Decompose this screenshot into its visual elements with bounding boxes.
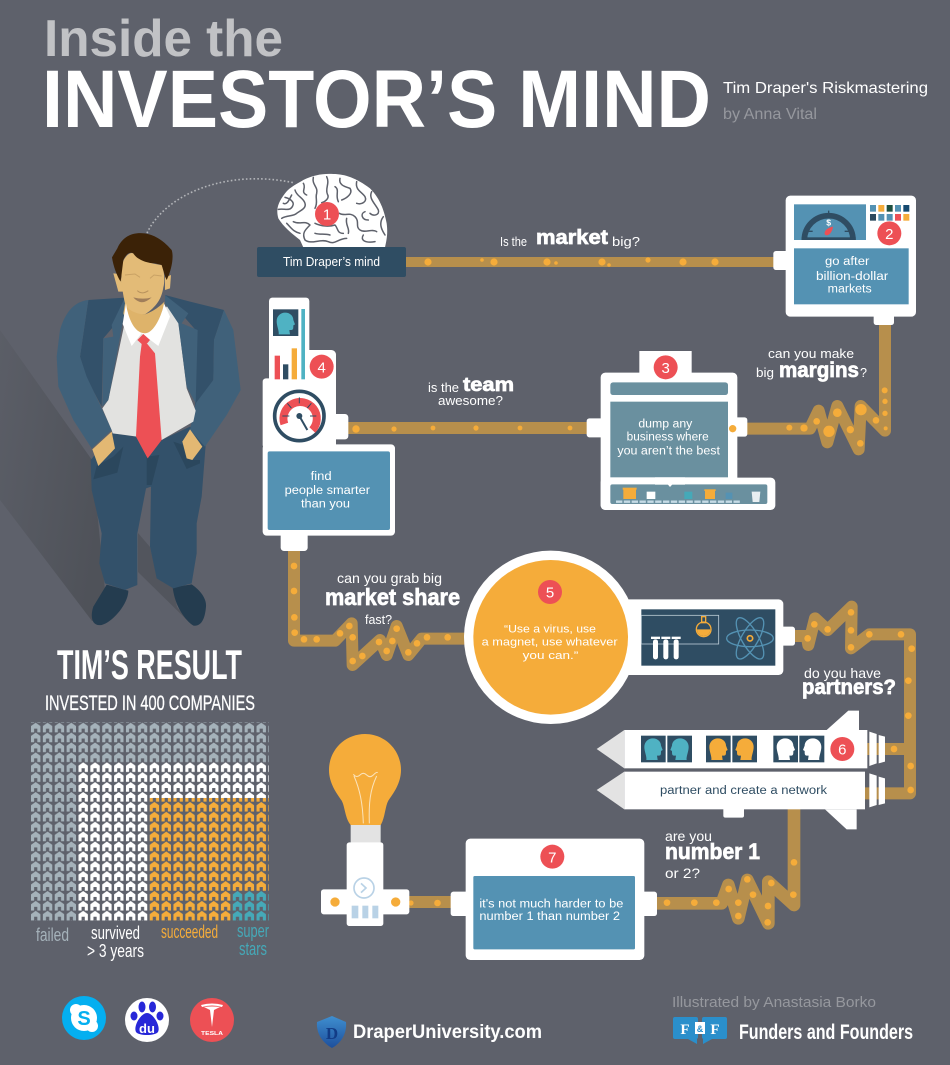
number 2: 2	[885, 226, 894, 243]
dotted thought line	[147, 179, 295, 233]
question: market share: can you grab big	[337, 570, 442, 586]
logo: Funders and Founders: &	[697, 1024, 704, 1034]
shirt	[102, 303, 196, 440]
pipe: mind to market	[400, 257, 780, 267]
step 2: machine	[773, 196, 916, 325]
number 3	[654, 355, 678, 379]
step 4: machine	[263, 298, 395, 551]
step 3: machine	[587, 351, 775, 510]
icon: skype: S	[77, 1008, 91, 1030]
icon: skype	[62, 996, 106, 1040]
icon: brain	[277, 174, 387, 247]
question: market: Is the	[500, 234, 527, 249]
bulb	[329, 734, 401, 843]
pipe: lab to rockets	[793, 607, 915, 793]
lapels	[102, 295, 198, 407]
upper rocket	[597, 711, 885, 768]
question: margins: margins	[779, 359, 859, 382]
title	[42, 10, 711, 145]
lab panel	[641, 609, 775, 666]
pipe: team to market share zigzag	[291, 547, 470, 665]
number 6: 6	[838, 742, 847, 759]
text panel: it's not much harder to be	[479, 896, 624, 910]
question: team: team	[463, 375, 514, 396]
question: partners	[802, 665, 896, 699]
neck and face	[113, 253, 171, 333]
box: Tim Draper's mind: Tim Draper’s mind	[283, 255, 380, 269]
collar	[123, 303, 170, 346]
quote circle: “Use a virus, use	[504, 623, 596, 635]
text panel: find	[311, 469, 332, 483]
text panel	[473, 876, 635, 949]
question: team	[428, 375, 514, 408]
flask	[696, 617, 711, 637]
logo: Funders and Founders: F	[680, 1022, 690, 1038]
colour squares	[870, 205, 909, 221]
number 3: 3	[661, 360, 670, 377]
chart: 400 companies pictogram	[31, 722, 269, 921]
question: number 1: or 2?	[665, 865, 700, 881]
man shadow	[0, 330, 192, 625]
question: margins	[756, 346, 867, 382]
chart legend: succeeded	[161, 922, 218, 942]
title: Inside the	[44, 10, 283, 68]
step 7: machine	[451, 839, 657, 960]
icon: baidu: du	[139, 1021, 155, 1036]
question: market: market	[536, 227, 608, 249]
question: partners: partners?	[802, 676, 896, 699]
text panel: number 1 than number 2	[479, 909, 620, 923]
quote circle: you can.”	[523, 650, 579, 662]
lower rocket: partner and create a network	[660, 783, 828, 797]
subtitle: by Anna Vital	[723, 106, 817, 123]
question: market share: fast?	[365, 612, 392, 627]
illustration: Tim Draper	[57, 233, 241, 626]
quote circle	[473, 560, 628, 715]
subtitle	[723, 80, 928, 123]
icon: tesla: TESLA	[201, 1031, 224, 1037]
jacket	[57, 295, 241, 448]
question: market share: market share	[325, 584, 460, 610]
subtitle: Tim Draper's Riskmastering	[723, 80, 928, 97]
question: partners: do you have	[804, 665, 881, 681]
question: team: is the	[428, 380, 459, 395]
question: market share	[325, 570, 460, 627]
question: margins: ?	[860, 365, 867, 380]
gauge panel	[794, 204, 866, 240]
conveyor belt	[610, 477, 767, 504]
text panel	[794, 248, 909, 304]
text panel: markets	[828, 282, 872, 296]
chart legend	[36, 921, 269, 961]
icon: tesla	[190, 998, 234, 1042]
lower rocket	[597, 772, 885, 829]
logo: Draper University: D	[326, 1024, 338, 1043]
chart legend: > 3 years	[87, 941, 144, 961]
pipe: team to best	[345, 422, 595, 434]
number 4	[310, 355, 334, 379]
chart legend: failed	[36, 925, 69, 945]
text panel	[268, 451, 390, 530]
text panel: go after	[825, 254, 869, 268]
portrait icon	[273, 309, 298, 336]
atom	[727, 614, 773, 663]
gauge panel: $	[826, 217, 831, 227]
text panel: you aren’t the best	[617, 443, 721, 457]
question: market	[500, 227, 640, 249]
box: Tim Draper's mind	[257, 247, 406, 277]
number 5: 5	[546, 585, 554, 602]
step 5: lab machine	[464, 551, 795, 724]
number 2	[877, 221, 901, 245]
tie	[136, 334, 162, 458]
pipe: rockets to number one zigzag	[653, 803, 797, 926]
question: number 1: number 1	[665, 839, 760, 864]
question: margins: big	[756, 365, 774, 380]
credit: illustrator: Illustrated by Anastasia Borko	[672, 994, 876, 1011]
pipe: market to margins zigzag	[743, 322, 888, 449]
pipe: bulb to number one	[408, 896, 456, 908]
step 1: brain	[257, 174, 406, 277]
heading: Tim's result: INVESTED IN 400 COMPANIES	[45, 692, 255, 715]
question: margins: can you make	[768, 346, 854, 361]
logo: Draper University: DraperUniversity.com	[353, 1022, 542, 1043]
question: team: awesome?	[438, 393, 503, 408]
text panel: people smarter	[285, 483, 370, 497]
hands	[92, 429, 202, 466]
number 1: 1	[323, 206, 331, 224]
shoes	[92, 584, 206, 626]
number 7: 7	[548, 849, 557, 866]
test tubes	[651, 637, 681, 659]
gauge	[275, 391, 324, 441]
question: market: big?	[612, 234, 640, 249]
question: number 1	[665, 828, 760, 881]
text panel	[610, 402, 728, 477]
partner heads	[641, 736, 824, 762]
number 5	[538, 580, 562, 604]
title: INVESTOR’S MIND	[42, 54, 711, 145]
bars	[275, 309, 305, 379]
step 6: rockets	[597, 711, 885, 829]
text panel: than you	[301, 496, 350, 510]
text panel: business where	[627, 430, 709, 444]
icon: light bulb machine	[321, 734, 409, 926]
pockets	[93, 442, 200, 485]
trousers	[91, 427, 206, 590]
heading: Tim's result: TIM’S RESULT	[57, 641, 242, 688]
logo: Funders and Founders: F	[710, 1022, 720, 1038]
text panel: dump any	[638, 417, 692, 431]
chart legend: survived	[91, 923, 140, 943]
heading: Tim's result	[45, 641, 255, 715]
quote circle: a magnet, use whatever	[482, 637, 618, 649]
number 1	[315, 202, 339, 226]
question: number 1: are you	[665, 828, 712, 844]
icon: baidu	[125, 998, 169, 1042]
hair	[112, 233, 173, 282]
logo: Funders and Founders	[673, 1017, 913, 1044]
number 4: 4	[317, 359, 326, 376]
text panel: billion-dollar	[816, 269, 888, 283]
chart legend: super	[237, 921, 269, 941]
chart legend: stars	[239, 939, 267, 959]
logo: Draper University	[317, 1016, 542, 1048]
number 6	[830, 737, 854, 761]
base	[321, 842, 409, 926]
number 7	[540, 845, 564, 869]
